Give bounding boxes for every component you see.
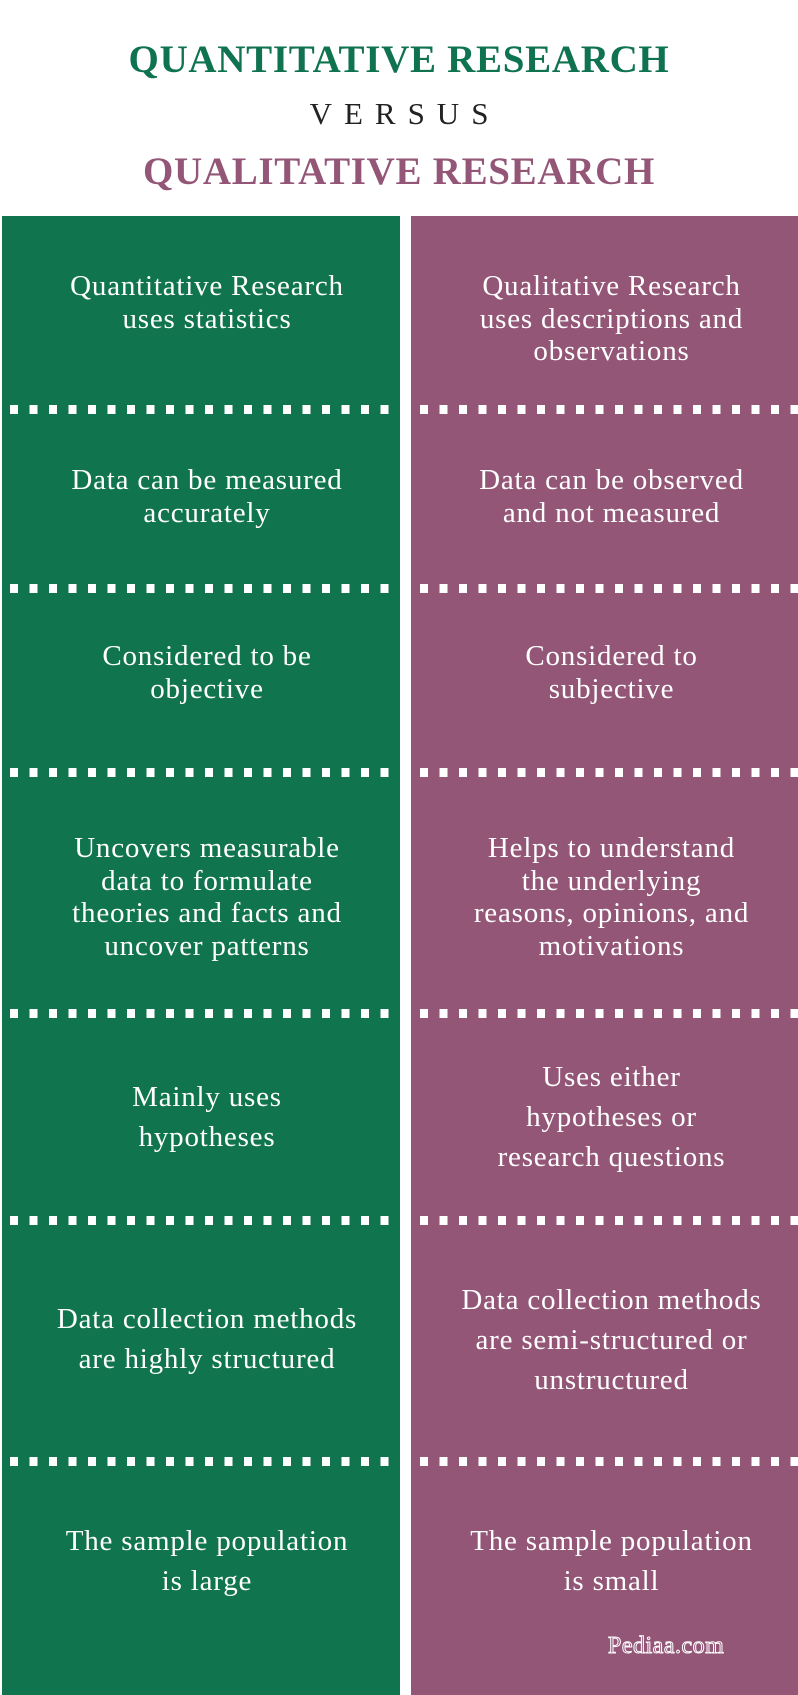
text: row1 right: Qualitative Research [482,270,741,302]
text: row2 right: and not measured [503,496,720,528]
text: row6 right: unstructured [534,1364,689,1396]
text: row1 left: uses statistics [122,302,292,334]
text: row2 left: Data can be measured [71,464,343,496]
text: row3 left: Considered to be [102,640,312,672]
text: row1 right: observations [533,335,690,367]
text: row1 right [480,270,743,367]
panel: quantitative column [2,216,400,1695]
text: row6 right: are semi-structured or [475,1324,748,1356]
text: row2 left [71,464,343,528]
text: row2 left: accurately [143,496,271,528]
text: row1 right: uses descriptions and [480,302,743,334]
text: row4 left: theories and facts and [72,897,342,929]
title: qualitative: QUALITATIVE RESEARCH [143,150,655,193]
text: row2 right: Data can be observed [479,464,744,496]
text: row5 left: hypotheses [139,1121,275,1153]
text: row5 left: Mainly uses [132,1081,282,1113]
text: row4 right: Helps to understand [488,832,735,864]
text: row1 left [70,270,344,334]
text: row4 right [474,832,749,962]
text: row5 left [132,1081,282,1153]
text: row4 left [72,832,342,962]
text: row6 left: are highly structured [79,1343,335,1375]
text: row3 left: objective [150,672,264,704]
text: row7 left [66,1525,348,1597]
panel: qualitative column [411,216,798,1695]
text: row3 right: Considered to [525,640,698,672]
text: row5 right: hypotheses or [526,1101,697,1133]
text: row7 right [470,1525,753,1597]
title: quantitative: QUANTITATIVE RESEARCH [129,38,669,81]
text: row2 right [479,464,744,528]
text: row6 right [461,1284,762,1396]
logo: Pediaa.com: Pediaa.com [608,1633,724,1659]
text: row5 right [498,1061,725,1173]
text: row7 left: is large [162,1565,252,1597]
text: row4 right: motivations [539,930,684,962]
text: row3 right [525,640,698,704]
title: versus: VERSUS [310,96,500,131]
text: row4 right: the underlying [522,864,701,896]
text: row4 left: data to formulate [101,864,313,896]
text: row1 left: Quantitative Research [70,270,344,302]
text: row5 right: Uses either [542,1061,681,1093]
text: row3 left [102,640,312,704]
text: row6 left: Data collection methods [57,1303,357,1335]
text: row7 right: is small [564,1565,659,1597]
text: row6 left [57,1303,357,1375]
text: row4 left: uncover patterns [104,930,310,962]
text: row6 right: Data collection methods [461,1284,762,1316]
text: row7 left: The sample population [66,1525,348,1557]
text: row5 right: research questions [498,1141,725,1173]
text: row4 right: reasons, opinions, and [474,897,749,929]
text: row4 left: Uncovers measurable [74,832,340,864]
text: row7 right: The sample population [470,1525,753,1557]
text: row3 right: subjective [549,672,674,704]
